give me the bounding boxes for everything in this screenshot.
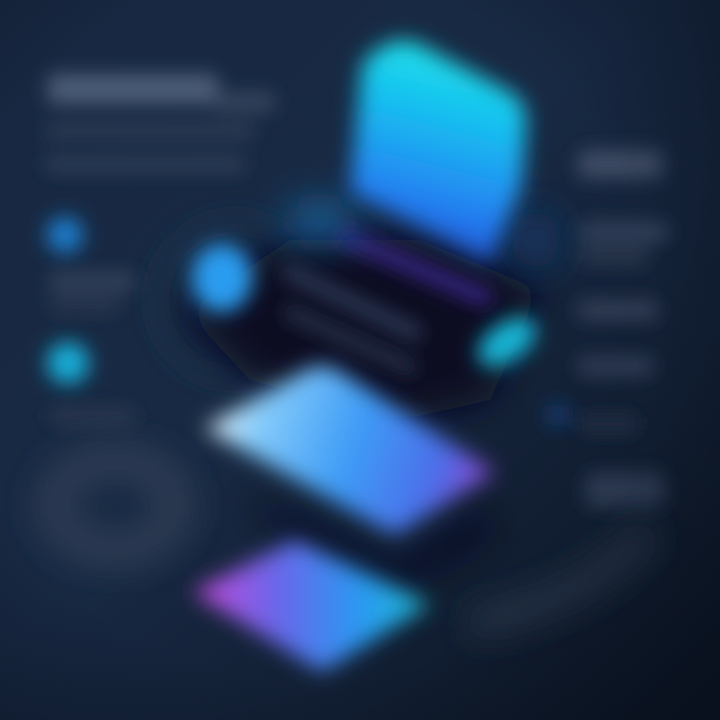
lower dark shadow below middle card bbox=[240, 490, 490, 585]
stack layer lines bbox=[285, 235, 490, 370]
circular orbit around center icon bbox=[155, 220, 315, 380]
icon: center-left blue orb bbox=[192, 244, 252, 312]
lower-right blurred arc bbox=[470, 530, 650, 625]
glow behind top panel bbox=[285, 204, 560, 270]
lower-left blurred ring bbox=[53, 460, 177, 550]
icon: left blue dot bbox=[47, 217, 83, 253]
icon: right teal capsule bbox=[469, 308, 545, 376]
left column text blocks bbox=[50, 272, 135, 424]
right column text blocks bbox=[578, 150, 668, 508]
icon: faint blue dot lower right bbox=[547, 404, 569, 426]
icon: left cyan dot bbox=[47, 342, 89, 384]
central dark stack bbox=[185, 240, 540, 420]
bottom panel: magenta to cyan card bbox=[193, 540, 430, 672]
heading: blurred title and subtitle bbox=[45, 74, 275, 172]
top panel: cyan-blue card bbox=[350, 41, 526, 262]
middle panel: light-blue to purple card bbox=[205, 366, 495, 535]
